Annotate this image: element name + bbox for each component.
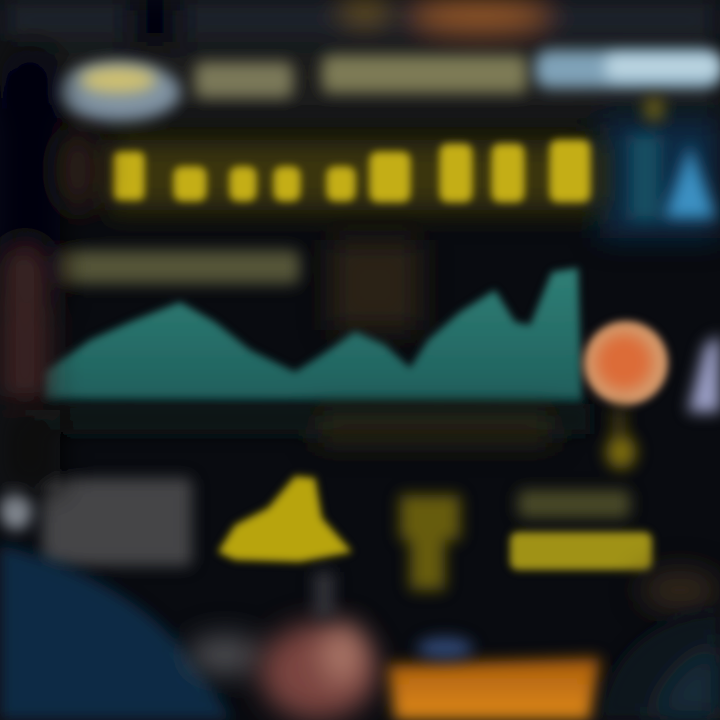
yellow stat text — [510, 490, 652, 570]
dark right foreground shape — [600, 570, 720, 720]
small yellow mark — [645, 98, 663, 120]
blue panel right — [600, 98, 720, 238]
bright blue band — [535, 50, 720, 88]
blue highlight — [650, 645, 720, 720]
glow — [388, 658, 600, 720]
person: hands — [187, 572, 376, 720]
person: head and shoulder silhouette — [0, 50, 100, 490]
grey sleeve cuff — [187, 635, 263, 675]
panel background — [600, 118, 720, 238]
small white tag at left — [0, 490, 32, 530]
hand — [260, 624, 376, 720]
circle core — [596, 334, 652, 390]
right lavender block — [688, 335, 720, 412]
dim grey caption row — [315, 415, 555, 443]
icon: orange circle — [584, 321, 668, 405]
raised finger — [314, 572, 334, 618]
yellow headline glow — [105, 140, 600, 210]
yellow mountain icon — [218, 476, 352, 562]
subtitle text, blurred — [50, 250, 300, 284]
orange glow bottom — [388, 637, 600, 720]
small yellow marker — [606, 435, 636, 469]
person: blue sleeve — [0, 545, 232, 720]
blue reflection — [417, 637, 473, 659]
grey stats block — [42, 478, 192, 566]
bright band core — [605, 55, 720, 79]
title blurred word 1 — [195, 62, 293, 98]
stat value — [510, 532, 652, 570]
ear/hair warm tint — [56, 128, 100, 212]
top title row — [56, 50, 720, 122]
neck shadow — [0, 410, 60, 490]
white badge glow — [56, 62, 180, 122]
chart baseline shadow — [30, 404, 590, 434]
large yellow headline, blurred — [114, 140, 590, 202]
dark shoulder — [600, 612, 720, 720]
teal area chart — [45, 268, 582, 402]
title blurred word 2 — [322, 55, 527, 93]
top header band — [0, 0, 720, 118]
badge yellow centre — [80, 67, 156, 93]
circle halo — [584, 321, 668, 405]
finger highlight — [320, 625, 364, 685]
connector to small marker — [612, 408, 626, 438]
skin edge — [0, 240, 50, 410]
warm rim — [640, 570, 720, 610]
vertical teal stripe — [630, 135, 660, 220]
head shadow — [0, 50, 60, 320]
icon: blue triangle — [664, 145, 716, 218]
yellow column icon — [400, 495, 460, 590]
dark amber tint above chart — [330, 240, 420, 330]
stat caption — [518, 490, 630, 518]
